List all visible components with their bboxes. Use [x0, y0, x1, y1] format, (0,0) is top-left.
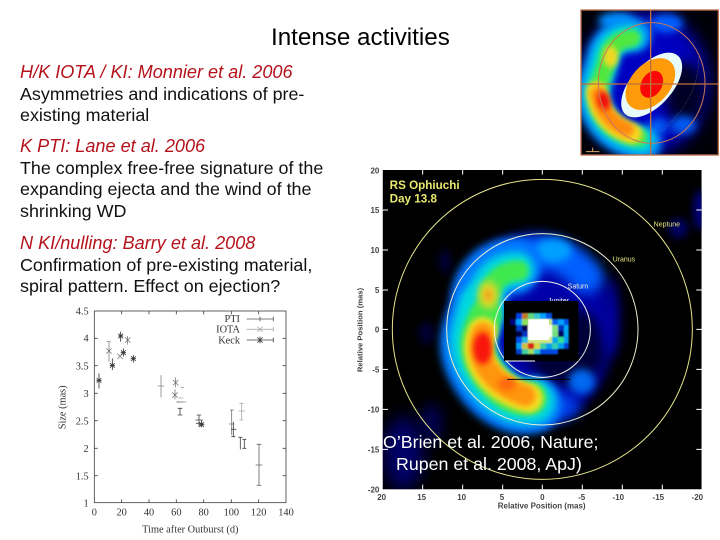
- x tick labels: [92, 508, 294, 519]
- orbit labels: [548, 222, 680, 305]
- description: asymmetries: [20, 84, 304, 125]
- size vs time chart: [58, 306, 294, 535]
- legend: [216, 314, 273, 346]
- y tick labels: 4: [83, 334, 89, 345]
- legend: PTI: [224, 314, 241, 325]
- x axis labels: -10: [613, 493, 625, 502]
- description: pre-existing material: Confirmation of pre-existing material,: [20, 254, 312, 274]
- y tick labels: 3.5: [76, 361, 89, 372]
- legend: Keck: [218, 335, 241, 346]
- text block: Monnier: [20, 62, 304, 125]
- orbit labels: Jupiter: [548, 298, 570, 305]
- y axis labels: -20: [368, 485, 380, 494]
- x tick labels: 20: [117, 508, 127, 519]
- y tick labels: 3: [83, 389, 89, 400]
- PTI error bars: [158, 375, 262, 485]
- y axis labels: -15: [368, 445, 380, 454]
- large radio map: RS Ophiuchi Day 13.8: [356, 166, 707, 511]
- orbit labels: Uranus: [613, 256, 636, 263]
- plot frame and ticks: [94, 311, 286, 503]
- caption: O'Brien and Rupen references: [383, 432, 598, 474]
- x tick labels: 140: [278, 508, 294, 519]
- inset interferometric image: [504, 301, 578, 361]
- y axis labels: [368, 166, 380, 494]
- y axis title: Size (mas): [58, 385, 69, 429]
- top-right radio map image: [581, 10, 718, 155]
- description: free-free signature: The complex free-free signature of the: [20, 158, 323, 178]
- description: asymmetries: existing material: [20, 105, 149, 125]
- x axis labels: [377, 493, 704, 502]
- Keck markers: [96, 332, 204, 427]
- x axis labels: 0: [540, 493, 545, 502]
- IOTA markers: [106, 336, 178, 399]
- x axis title: Relative Position (mas): [498, 502, 586, 511]
- x tick labels: 100: [224, 508, 239, 519]
- title: Intense activities: [271, 24, 450, 51]
- x axis labels: -15: [653, 493, 665, 502]
- y axis labels: 5: [375, 286, 380, 295]
- y tick labels: 4.5: [76, 306, 89, 317]
- x axis labels: 15: [417, 493, 427, 502]
- x axis labels: -5: [578, 493, 586, 502]
- x tick labels: 120: [251, 508, 266, 519]
- description: free-free signature: shrinking WD: [20, 201, 126, 221]
- y axis labels: 20: [370, 166, 380, 175]
- y tick labels: 1.5: [76, 471, 89, 482]
- description: free-free signature: [20, 158, 323, 221]
- x axis labels: -20: [692, 493, 704, 502]
- x tick labels: 40: [144, 508, 154, 519]
- reference: Barry et al. 2008: N KI/nulling: Barry et al. 2008: [20, 233, 255, 253]
- x tick labels: 60: [171, 508, 181, 519]
- y axis labels: -10: [368, 405, 380, 414]
- reference: Lane et al. 2006: K PTI: Lane et al. 2006: [20, 136, 205, 156]
- x tick labels: 80: [199, 508, 209, 519]
- x tick labels: 0: [92, 508, 97, 519]
- tick marks: [383, 170, 702, 489]
- y axis title: Relative Position (mas): [356, 287, 365, 372]
- y tick labels: [76, 306, 89, 509]
- orbit labels: Saturn: [568, 284, 588, 291]
- y axis labels: 0: [375, 325, 380, 334]
- y tick labels: 2: [83, 444, 89, 455]
- x axis labels: 5: [500, 493, 505, 502]
- caption: O'Brien and Rupen references: O’Brien et al. 2006, Nature;: [383, 432, 598, 452]
- description: pre-existing material: [20, 254, 312, 296]
- description: free-free signature: expanding ejecta and the wind of the: [20, 179, 311, 199]
- reference: Monnier et al. 2006: H/K IOTA / KI: Monnier et al. 2006: [20, 62, 293, 82]
- x axis labels: 20: [377, 493, 387, 502]
- description: pre-existing material: spiral pattern. Effect on ejection?: [20, 276, 280, 296]
- orbit circles: [392, 179, 692, 479]
- heading: RS Ophiuchi: RS Ophiuchi: [390, 179, 460, 192]
- y tick labels: 2.5: [76, 416, 89, 427]
- map panel: [383, 170, 707, 490]
- y tick labels: 1: [83, 498, 89, 509]
- orbit labels: Neptune: [654, 222, 680, 229]
- y axis labels: 15: [370, 206, 380, 215]
- text block: Barry: [20, 233, 312, 296]
- x axis title: Time after Outburst (d): [142, 524, 238, 535]
- legend: IOTA: [216, 325, 241, 336]
- text block: Lane: [20, 136, 323, 221]
- heading: Day 13.8: Day 13.8: [390, 192, 437, 205]
- caption: O'Brien and Rupen references: Rupen et al. 2008, ApJ): [396, 454, 582, 474]
- y axis labels: -5: [372, 365, 380, 374]
- x axis labels: 10: [457, 493, 467, 502]
- description: asymmetries: Asymmetries and indications of pre-: [20, 84, 304, 104]
- y axis labels: 10: [370, 246, 380, 255]
